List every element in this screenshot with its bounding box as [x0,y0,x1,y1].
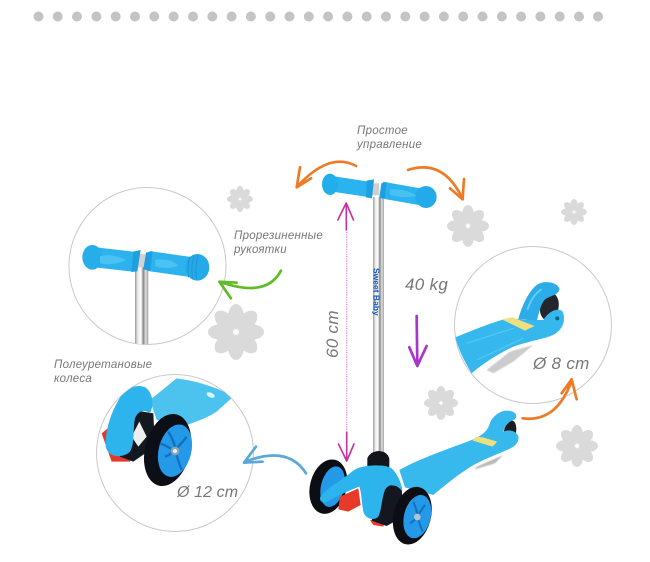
label: rear wheel size: Ø 8 cm [532,354,590,373]
panel: front wheel detail [96,374,254,532]
label: rubberized grips: Прорезиненные [234,230,323,242]
deck shadow [475,455,503,469]
icon: flower small right [561,199,587,225]
icon: flower bottom right [556,425,598,467]
front wheel close-up [102,378,233,491]
detail circle [96,374,254,532]
panel: rear wheel detail [454,246,612,404]
detail circle [454,246,612,404]
arrow: orange to rear wheel [523,379,577,419]
brand label on pole: Sweet Baby [372,268,382,316]
deck [399,411,518,495]
arrow: magenta height [338,203,354,461]
rear wheel [502,419,518,444]
label: height: 60 cm [323,310,342,358]
dotted top border [34,12,603,22]
icon: flower centre [424,386,458,420]
right front wheel [387,483,438,549]
icon: flower large left [208,304,264,360]
label: front wheel size: Ø 12 cm [176,484,238,501]
label: weight: 40 kg [405,275,448,294]
label: rubberized grips: рукоятки [233,244,287,256]
icon: flower small left [227,186,253,212]
panel: rubber handle detail [69,188,226,345]
scooter pole [373,197,384,455]
arrow: blue to front wheel [244,447,306,473]
main scooter [304,174,518,549]
steering collar [367,451,389,468]
arrow: green to handle [219,271,281,298]
label: simple steering: управление [356,139,422,151]
rear deck close-up [455,282,564,373]
scooter base [304,411,518,549]
handlebar [322,174,437,208]
deck sticker [473,437,497,447]
fork [320,465,402,519]
label: simple steering: Простое [357,125,408,137]
detail circle [69,188,226,344]
arrow: orange left [297,162,356,187]
arrow: orange right [408,167,464,199]
label: polyurethane wheels: колеса [54,373,92,385]
left front wheel [304,455,353,518]
handlebar close-up [82,245,209,345]
label: polyurethane wheels: Полеуретановые [54,359,152,371]
red mechanism [338,488,385,527]
arrow: purple weight [409,316,427,366]
icon: flower near handle [447,205,489,247]
